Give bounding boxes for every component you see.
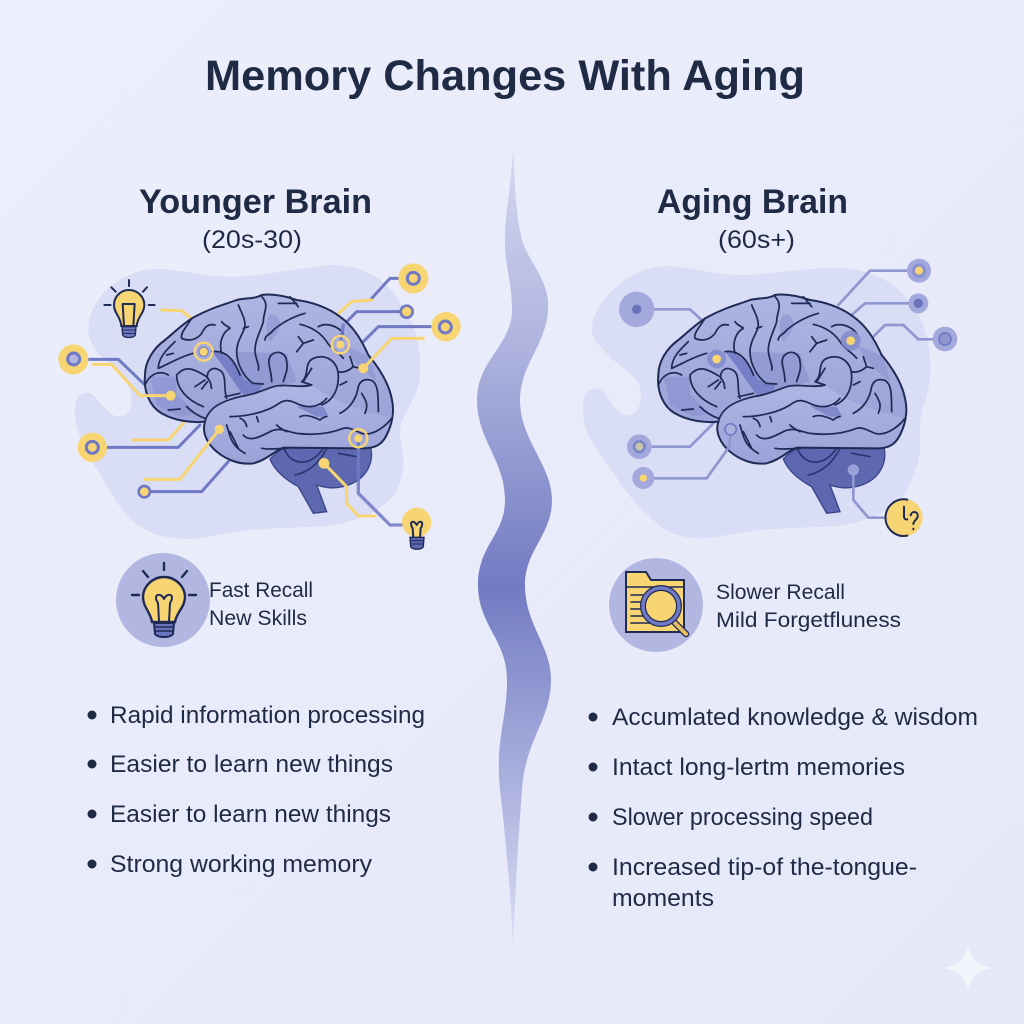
circuit lines over brain <box>93 325 423 525</box>
brain <box>145 295 393 513</box>
right bullet list <box>588 704 978 912</box>
title: Memory Changes With Aging <box>205 52 805 100</box>
icon: light bulb badge <box>116 553 210 647</box>
circuit lines over brain <box>643 430 887 518</box>
right bullet list: Slower processing speed <box>612 804 873 831</box>
icon: folder with magnifier badge <box>609 558 703 652</box>
left column heading <box>139 183 372 254</box>
right column heading: Aging Brain <box>657 183 848 221</box>
right bullet list: Accumlated knowledge & wisdom <box>612 704 978 731</box>
left column heading: Younger Brain <box>139 183 372 221</box>
callout: fast recall: Fast Recall <box>209 579 313 602</box>
right bullet list: moments <box>612 885 714 912</box>
callout: slower recall: Mild Forgetfluness <box>716 609 901 632</box>
right bullet list: Intact long-lertm memories <box>612 754 905 781</box>
purple circuit lines behind brain <box>73 278 445 492</box>
background blob <box>583 266 930 538</box>
left bullet list: Easier to learn new things <box>110 801 391 828</box>
callout: slower recall <box>609 558 901 652</box>
left bullet list: Rapid information processing <box>110 702 425 729</box>
circuit lines behind brain <box>637 271 945 447</box>
background blob <box>75 265 420 539</box>
left bullet list: Strong working memory <box>110 851 372 878</box>
central wavy divider <box>477 148 552 945</box>
nodes <box>58 263 461 497</box>
left column heading: (20s-30) <box>202 226 302 254</box>
icon: small light bulb bottom right <box>402 508 431 549</box>
callout: fast recall: New Skills <box>209 607 307 630</box>
left bullet list: Easier to learn new things <box>110 751 393 778</box>
yellow circuit lines behind brain <box>133 300 372 440</box>
left bullet list <box>88 702 425 878</box>
right column heading: (60s+) <box>718 226 795 254</box>
brain <box>658 295 906 513</box>
icon: small light bulb top left <box>104 280 155 337</box>
icon: question badge <box>885 499 923 536</box>
callout: fast recall <box>116 553 313 647</box>
nodes <box>619 259 957 489</box>
right bullet list: Increased tip-of the-tongue- <box>612 854 917 881</box>
icon: sparkle watermark <box>944 944 992 992</box>
panel: younger brain illustration <box>58 263 461 549</box>
panel: aging brain illustration <box>583 259 957 538</box>
right column heading <box>657 183 848 254</box>
callout: slower recall: Slower Recall <box>716 581 845 604</box>
